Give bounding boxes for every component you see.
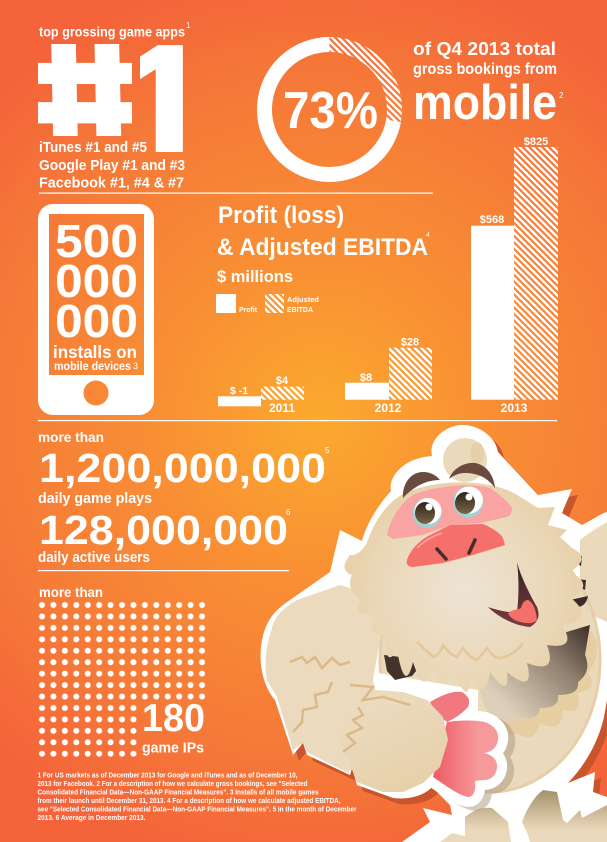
caption: game IPs: game IPs bbox=[142, 740, 204, 756]
bars 2013 bbox=[471, 136, 558, 415]
right arm bbox=[580, 522, 607, 622]
panel: 73% donut bbox=[264, 44, 394, 174]
label: more than: more than bbox=[39, 584, 103, 600]
installs number: 500 bbox=[55, 215, 138, 267]
face mask bbox=[387, 485, 512, 539]
chart heading: Profit (loss) bbox=[218, 202, 344, 229]
right eye bbox=[453, 486, 483, 518]
belly scallops bbox=[480, 630, 597, 737]
text: mobile bookings: 2 bbox=[559, 91, 564, 100]
paw white outline bbox=[372, 672, 498, 797]
chart heading: & Adjusted EBITDA bbox=[217, 234, 428, 261]
chart heading: $ millions bbox=[217, 267, 293, 286]
feet bbox=[440, 790, 607, 842]
footnotes: Consolidated Financial Data—Non-GAAP Financial Measures". 3 Installs of all mobile games bbox=[38, 790, 319, 796]
bars 2011: $4 bbox=[276, 375, 289, 387]
fur cracks bbox=[290, 657, 410, 752]
store rankings: Google Play #1 and #3 bbox=[39, 157, 185, 174]
big hash and one: 1 bbox=[114, 6, 216, 211]
snout bbox=[407, 524, 505, 567]
big hash and one: # bbox=[7, 9, 173, 201]
daily game plays number: 1,200,000,000 bbox=[39, 445, 326, 491]
big hash and one bbox=[38, 44, 183, 152]
bars 2013: $825 bbox=[524, 136, 548, 148]
bars 2011: 2011 bbox=[269, 401, 295, 415]
mouth bbox=[488, 562, 539, 627]
footnote marker 5: 5 bbox=[325, 446, 330, 455]
dot grid bbox=[36, 599, 208, 759]
chart legend: Profit bbox=[239, 307, 258, 314]
label: more than: more than bbox=[38, 429, 104, 445]
installs caption: installs on bbox=[53, 342, 137, 362]
footnotes bbox=[38, 772, 357, 822]
bar chart bbox=[218, 136, 558, 415]
daily active users number: 128,000,000 bbox=[39, 507, 288, 553]
chest shadow bbox=[478, 625, 590, 722]
chart heading: 4 bbox=[426, 232, 430, 239]
icon: phone bbox=[38, 204, 154, 415]
bars 2012: $28 bbox=[401, 336, 419, 348]
pink paw bbox=[430, 692, 498, 797]
chart heading bbox=[217, 202, 430, 286]
installs caption: 3 bbox=[133, 361, 138, 371]
donut solid portion bbox=[264, 44, 394, 174]
chart legend: Adjusted bbox=[287, 295, 319, 304]
panel: phone installs bbox=[38, 204, 154, 415]
heading: top grossing game apps: top grossing game apps bbox=[39, 24, 185, 40]
text: mobile bookings: of Q4 2013 total bbox=[413, 38, 556, 59]
dark fur under chin bbox=[384, 655, 425, 680]
installs number bbox=[55, 215, 138, 347]
left eye bbox=[412, 498, 442, 528]
number 180: 180 bbox=[142, 697, 205, 740]
ear bbox=[443, 438, 487, 482]
bars 2011: $ -1 bbox=[230, 385, 248, 397]
bars 2012: $8 bbox=[360, 372, 372, 384]
belly bbox=[380, 528, 600, 792]
installs caption bbox=[53, 342, 138, 373]
footnotes: from their launch until December 31, 2013. 4 For a description of how we calculate adjusted EBITDA, bbox=[38, 798, 341, 805]
installs number: 000 bbox=[55, 295, 138, 347]
panel: game IPs bbox=[36, 584, 208, 759]
character: yeti bbox=[261, 425, 607, 842]
eyebrows bbox=[403, 463, 495, 498]
bars 2013: $568 bbox=[480, 214, 504, 226]
donut hatched portion bbox=[330, 44, 394, 121]
drop shadow bbox=[267, 431, 607, 842]
panel: plays and users bbox=[38, 429, 330, 566]
head fur bbox=[344, 482, 583, 692]
store rankings: iTunes #1 and #5 bbox=[39, 139, 147, 156]
caption: daily game plays: daily game plays bbox=[38, 491, 152, 507]
bars 2011 bbox=[218, 375, 304, 415]
text: mobile bookings: gross bookings from bbox=[413, 61, 557, 78]
paw shadow bbox=[440, 724, 505, 801]
bars 2013: 2013 bbox=[501, 401, 528, 415]
dark fur accents bbox=[564, 556, 588, 607]
left arm bbox=[266, 585, 448, 792]
text: mobile bookings bbox=[413, 38, 564, 130]
footnotes: 2013 for Facebook. 2 For a description of how we calculate gross bookings, see "Selected bbox=[38, 781, 308, 788]
forearm bbox=[340, 690, 448, 792]
installs number: 000 bbox=[55, 255, 138, 307]
text: mobile bookings: mobile bbox=[413, 76, 557, 130]
footnotes: 1 For US markets as of December 2013 for Google and iTunes and as of December 10, bbox=[38, 772, 298, 780]
store rankings: Facebook #1, #4 & #7 bbox=[39, 174, 184, 192]
panel: top grossing bbox=[38, 22, 190, 190]
footnote marker 1: 1 bbox=[186, 21, 191, 30]
chin fur lines bbox=[417, 642, 523, 660]
white outline bbox=[261, 425, 607, 842]
bars 2012 bbox=[345, 336, 432, 415]
footnotes: see "Selected Consolidated Financial Data—Non-GAAP Financial Measures". 5 In the month of December bbox=[38, 807, 357, 814]
chart legend: EBITDA bbox=[287, 305, 314, 314]
donut value: 73% bbox=[283, 82, 378, 140]
footnote marker 6: 6 bbox=[286, 508, 291, 517]
bars 2012: 2012 bbox=[375, 401, 402, 415]
caption: daily active users: daily active users bbox=[38, 550, 150, 566]
footnotes: 2013. 6 Average in December 2013. bbox=[38, 815, 146, 822]
chart legend bbox=[216, 294, 319, 314]
installs caption: mobile devices bbox=[54, 359, 131, 373]
store rankings bbox=[39, 139, 185, 192]
